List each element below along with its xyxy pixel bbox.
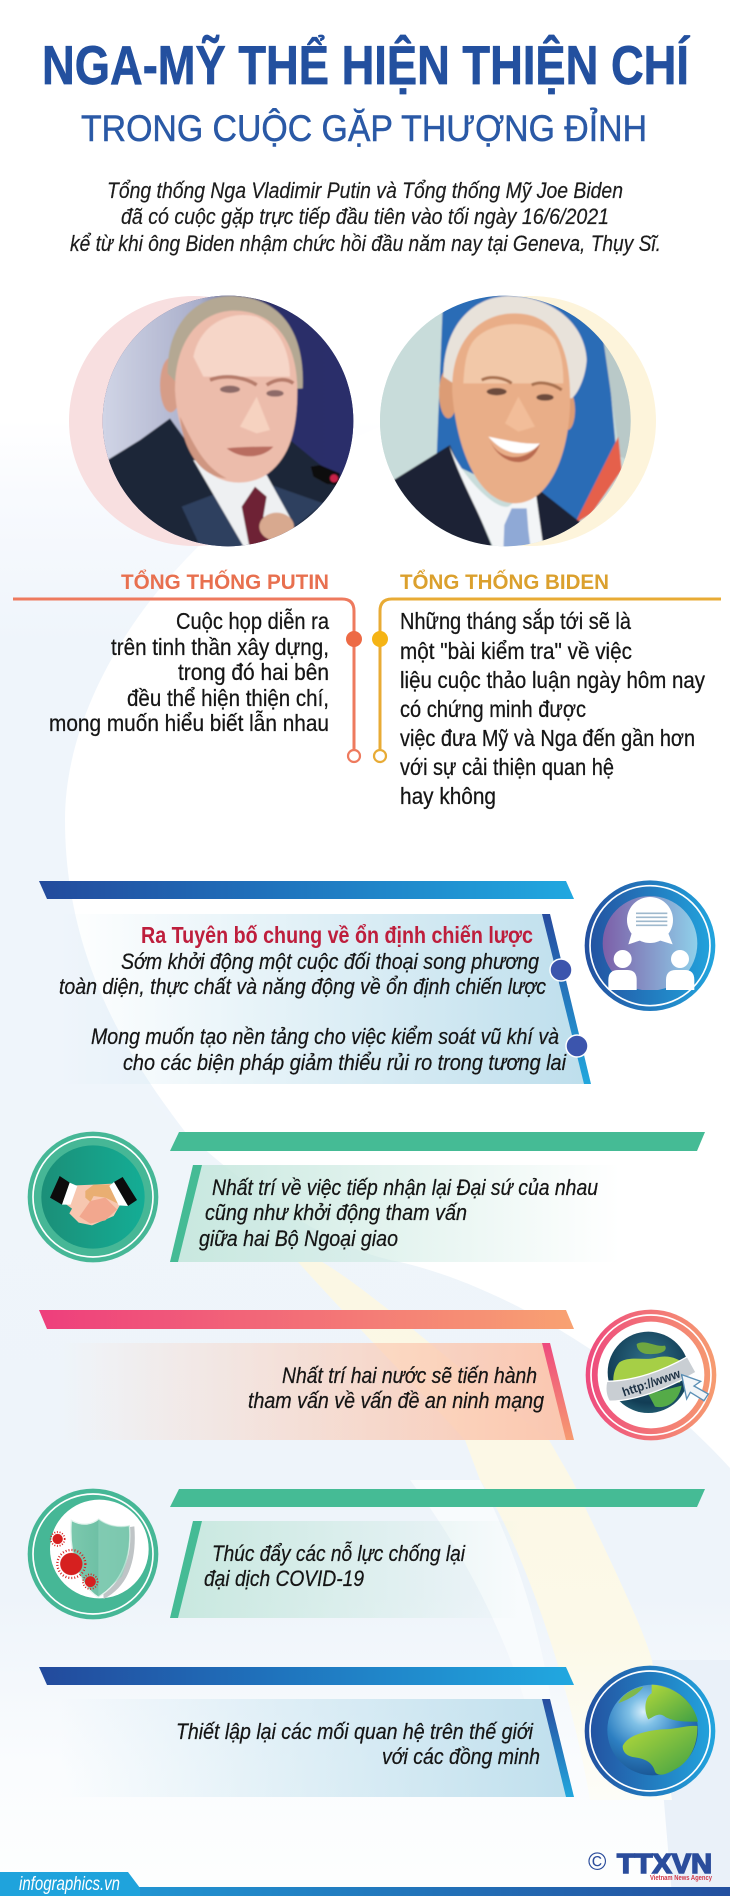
icon: dialogue <box>585 880 715 1011</box>
panel: COVID-19: Thúc đẩy các nỗ lực chống lại <box>212 1541 466 1566</box>
logo: TTXVN: Vietnam News Agency <box>650 1875 712 1882</box>
panel: alliances <box>39 1667 574 1797</box>
connector: Biden timeline <box>372 599 721 762</box>
panel: strategic stability declaration: toàn diện, thực chất và năng động về ổn định chiến lược <box>59 974 546 999</box>
panel: strategic stability declaration: cho các biện pháp giảm thiểu rủi ro trong tương lai <box>123 1050 567 1075</box>
text: Putin statement: đều thể hiện thiện chí, <box>127 685 329 711</box>
icon: handshake <box>28 1132 158 1262</box>
panel: strategic stability declaration: Ra Tuyên bố chung về ổn định chiến lược <box>141 922 533 948</box>
text: Biden statement: hay không <box>400 783 496 809</box>
panel: strategic stability declaration: Mong muốn tạo nền tảng cho việc kiểm soát vũ khí và <box>91 1024 559 1049</box>
text: Biden statement: Những tháng sắp tới sẽ là <box>400 608 631 634</box>
panel: cyber security: Nhất trí hai nước sẽ tiến hành <box>282 1363 537 1388</box>
intro text <box>70 178 661 256</box>
panel: COVID-19 <box>170 1489 705 1618</box>
text: Putin statement: Cuộc họp diễn ra <box>176 608 329 634</box>
text: Putin statement <box>49 608 329 736</box>
panel: cyber security: tham vấn về vấn đề an ninh mạng <box>248 1388 544 1413</box>
text: Biden statement <box>400 608 705 809</box>
panel: ambassadors: cũng như khởi động tham vấn <box>205 1200 467 1225</box>
icon: shield and virus <box>28 1489 158 1619</box>
logo: TTXVN: TTXVN <box>617 1848 712 1879</box>
text: Putin statement: trên tinh thần xây dựng, <box>111 634 329 660</box>
panel: ambassadors: Nhất trí về việc tiếp nhận lại Đại sứ của nhau <box>212 1175 598 1200</box>
text: Biden statement: một "bài kiểm tra" về việc <box>400 638 632 664</box>
footer bar: infographics.vn <box>19 1874 120 1895</box>
text: Putin statement: mong muốn hiểu biết lẫn nhau <box>49 710 329 736</box>
panel: alliances: Thiết lập lại các mối quan hệ trên thế giới <box>176 1719 534 1744</box>
connector: Putin timeline <box>13 599 362 762</box>
icon: earth <box>585 1666 715 1796</box>
portrait: Biden <box>375 290 656 557</box>
text: Putin statement: trong đó hai bên <box>178 659 329 685</box>
intro text: Tổng thống Nga Vladimir Putin và Tổng thống Mỹ Joe Biden <box>107 178 623 203</box>
logo: TTXVN: © <box>588 1848 607 1876</box>
panel: COVID-19: đại dịch COVID-19 <box>204 1566 364 1591</box>
footer bar <box>0 1872 730 1896</box>
intro text: đã có cuộc gặp trực tiếp đầu tiên vào tối ngày 16/6/2021 <box>121 204 609 229</box>
portrait: Putin <box>69 290 360 557</box>
title: TRONG CUỘC GẶP THƯỢNG ĐỈNH <box>81 108 647 149</box>
panel: ambassadors: giữa hai Bộ Ngoại giao <box>199 1226 398 1251</box>
heading: Tổng thống Biden: TỔNG THỐNG BIDEN <box>400 568 609 594</box>
panel: cyber security <box>39 1310 574 1440</box>
panel: strategic stability declaration: Sớm khởi động một cuộc đối thoại song phương <box>121 949 539 974</box>
logo: TTXVN <box>588 1848 712 1882</box>
text: Biden statement: có chứng minh được <box>400 696 586 722</box>
heading: Tổng thống Putin: TỔNG THỐNG PUTIN <box>121 568 329 594</box>
panel: ambassadors <box>170 1132 705 1262</box>
title <box>42 34 690 149</box>
panel: alliances: với các đồng minh <box>382 1744 540 1769</box>
icon: web globe <box>586 1310 716 1440</box>
text: Biden statement: với sự cải thiện quan hệ <box>400 754 614 780</box>
icon: web globe: http://www. <box>620 1366 685 1400</box>
panel: strategic stability declaration <box>39 881 591 1084</box>
